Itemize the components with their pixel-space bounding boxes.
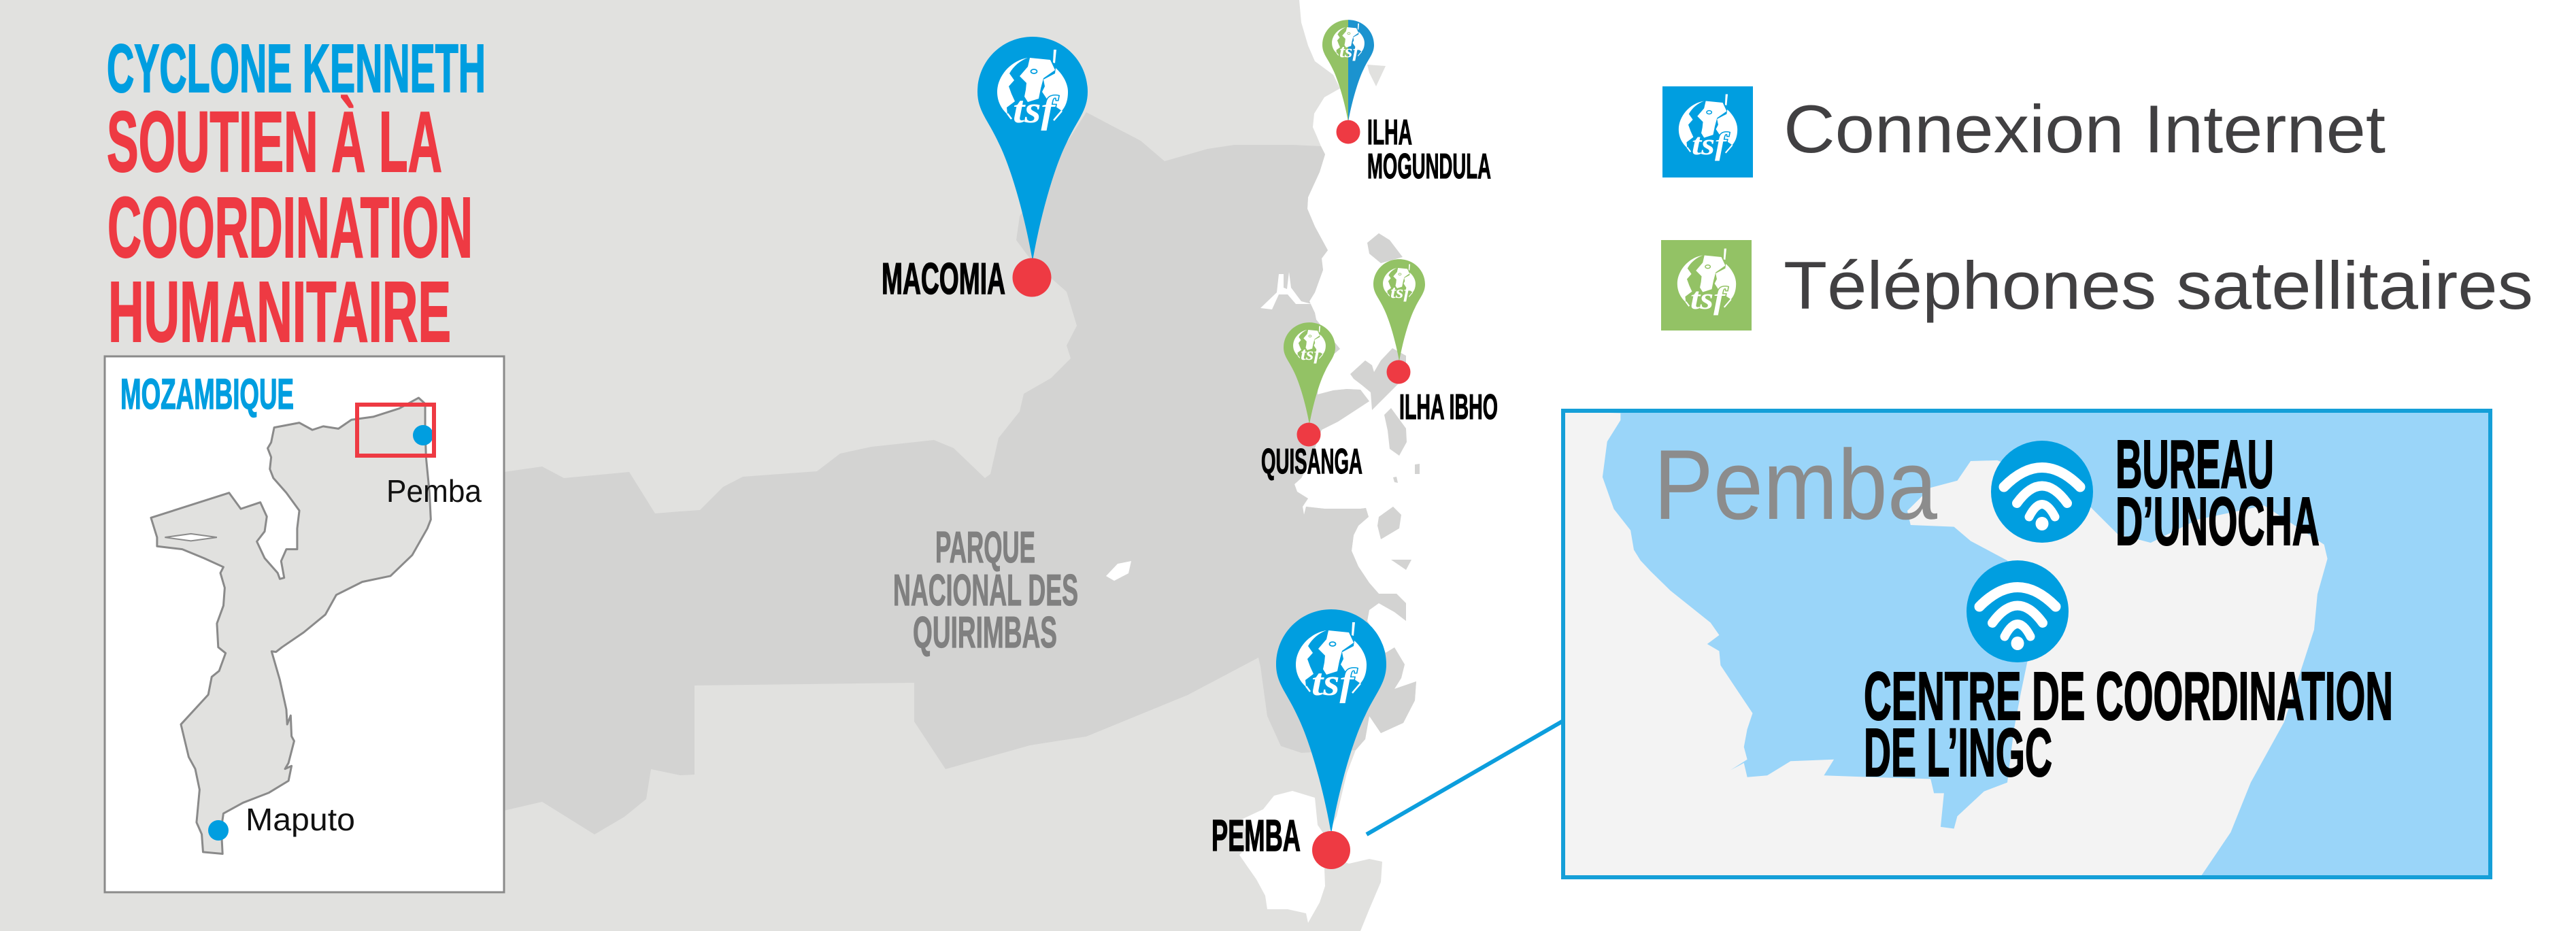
title: CYCLONE KENNETH xyxy=(107,31,486,107)
label: UNOCHA office: D’UNOCHA xyxy=(2115,484,2320,560)
icon: blue tsf square: tsf xyxy=(1692,126,1730,161)
park label: NACIONAL DES xyxy=(893,565,1078,615)
label: ILHA xyxy=(1367,113,1412,152)
legend: internet connection: Connexion Internet xyxy=(1784,91,2386,167)
national park area xyxy=(504,112,1416,834)
pin: Ilha Mogundula: tsf xyxy=(1339,41,1361,61)
legend: satellite phones: Téléphones satellitaires xyxy=(1784,248,2533,323)
label: UNOCHA office xyxy=(2115,426,2320,560)
Maputo marker xyxy=(208,802,355,841)
Pemba marker xyxy=(386,425,482,509)
label: INGC coordination centre: DE L’INGC xyxy=(1864,715,2052,791)
panel: Mozambique locator map xyxy=(105,356,504,892)
pin: Pemba: tsf xyxy=(1311,662,1358,704)
land xyxy=(1564,411,2328,877)
park label: QUIRIMBAS xyxy=(913,607,1057,657)
pin: Macomia xyxy=(882,37,1088,303)
icon: wifi INGC xyxy=(1967,560,2069,662)
Pemba marker: Pemba xyxy=(386,473,482,509)
label: MACOMIA xyxy=(882,254,1005,303)
panel: Pemba inset map xyxy=(1563,411,2490,877)
title: COORDINATION xyxy=(107,180,473,275)
label: PEMBA xyxy=(1211,811,1301,860)
legend: satellite phones xyxy=(1661,240,2533,331)
icon: blue tsf square xyxy=(1662,86,1753,177)
title: HUMANITAIRE xyxy=(108,264,451,360)
pin: Ilha Ibho: tsf xyxy=(1390,282,1412,302)
title xyxy=(107,31,486,360)
title: SOUTIEN À LA xyxy=(107,94,442,190)
label: INGC coordination centre xyxy=(1864,658,2393,791)
label: UNOCHA office: BUREAU xyxy=(2115,426,2274,503)
legend: internet connection xyxy=(1662,86,2386,177)
Mozambique label: MOZAMBIQUE xyxy=(120,371,294,418)
pin: Macomia: tsf xyxy=(1013,89,1059,131)
pin: Quisanga: tsf xyxy=(1301,344,1322,364)
pin: Pemba xyxy=(1211,609,1386,869)
label: QUISANGA xyxy=(1261,442,1362,481)
pin: Quisanga xyxy=(1261,322,1362,481)
label xyxy=(1367,113,1491,186)
icon: green tsf square: tsf xyxy=(1690,281,1728,316)
Mozambique outline xyxy=(151,398,431,854)
icon: wifi UNOCHA xyxy=(1991,441,2093,543)
park label xyxy=(893,522,1078,657)
label: ILHA IBHO xyxy=(1399,388,1498,427)
pin: Ilha Ibho xyxy=(1373,259,1498,427)
park label: PARQUE xyxy=(935,522,1035,572)
connector line to Pemba inset xyxy=(1367,721,1563,834)
Pemba heading: Pemba xyxy=(1654,429,1938,540)
icon: green tsf square xyxy=(1661,240,1752,331)
Maputo marker: Maputo xyxy=(246,802,355,837)
label: MOGUNDULA xyxy=(1367,147,1491,186)
islands and water details xyxy=(1106,65,1420,581)
red locator rectangle xyxy=(357,405,434,456)
pin: Ilha Mogundula xyxy=(1322,20,1491,186)
